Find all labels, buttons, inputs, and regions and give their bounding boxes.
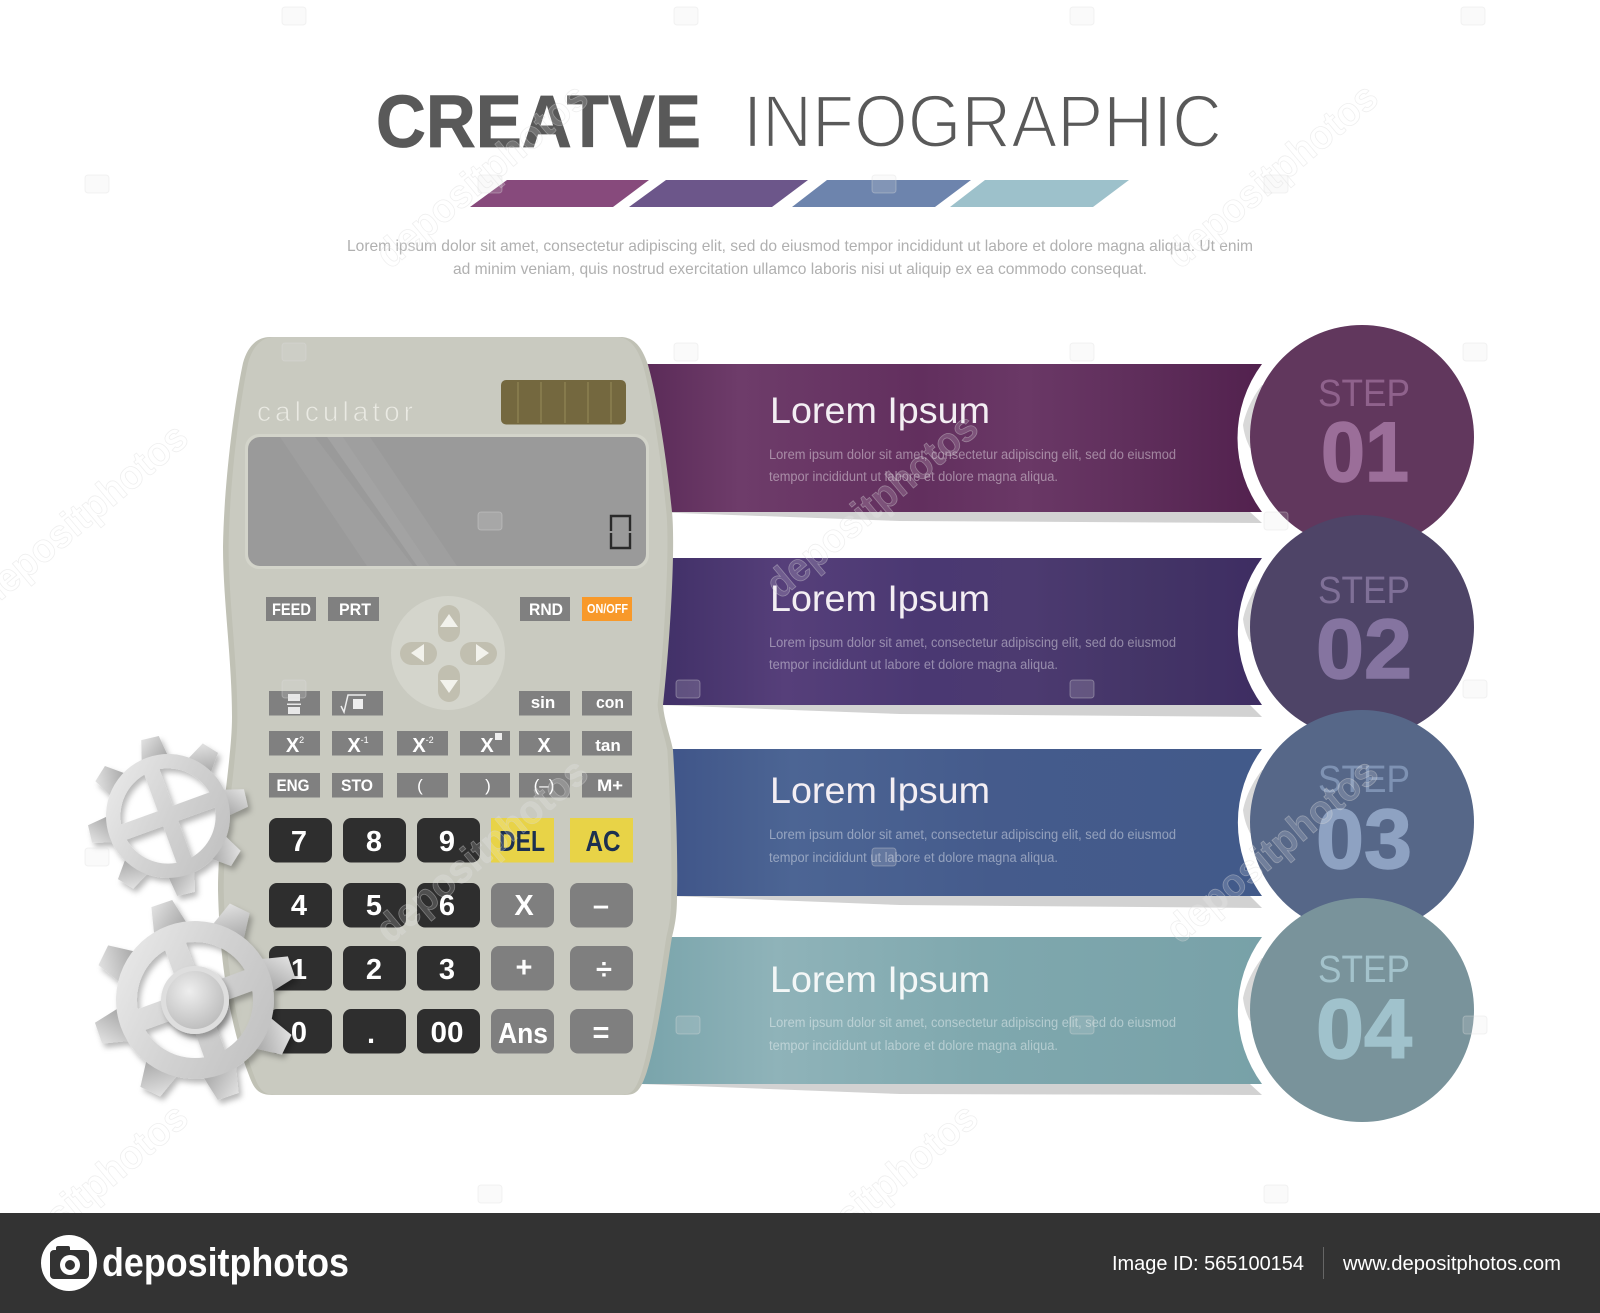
ribbon: step 2 [640,558,1262,717]
math keys row 2: X [537,735,551,757]
top function keys: FEED [272,600,311,619]
operator keys: X [514,890,534,922]
step circle 2 [1238,515,1474,739]
watermark: depositphotos [368,750,596,952]
watermark: depositphotos [758,1095,986,1297]
math keys row 2: tan [595,736,621,755]
icon: small gear [72,720,264,912]
title: CREATVE [376,80,701,163]
step circle 3: 03 [1316,792,1412,886]
watermark: depositphotos [368,75,596,277]
top function keys [266,597,632,621]
intro text: ad minim veniam, quis nostrud exercitation ullamco laboris nisi ut aliquip ex ea commodo consequat. [453,261,1147,278]
math keys row 1: sin [531,693,555,712]
math keys row 3 [269,773,632,798]
ribbon: step 4: Lorem Ipsum [770,959,990,1000]
number pad: 6 [439,890,455,922]
step circle 3: STEP [1318,759,1410,801]
math keys row 2: X [412,735,426,757]
number pad: 7 [291,826,307,858]
website url: www.depositphotos.com [1342,1253,1561,1275]
top function keys: ON/OFF [587,601,628,616]
ribbon: step 2: Lorem Ipsum [770,578,990,619]
operator keys: = [593,1017,609,1049]
step circle 2: 02 [1316,602,1412,696]
math keys row 2: X [286,735,299,757]
math keys row 2: X [347,735,361,757]
watermark: depositphotos [1158,750,1386,952]
intro text: Lorem ipsum dolor sit amet, consectetur adipiscing elit, sed do eiusmod tempor incididunt ut labore et dolore magna aliqua. Ut enim [347,238,1253,255]
math keys row 2: -2 [426,735,434,745]
operator keys: + [516,952,532,984]
step circle 4 [1238,898,1474,1122]
solar panel [501,380,626,424]
math keys row 2: -1 [361,735,369,745]
number pad: 3 [439,954,455,986]
title: INFOGRAPHIC [743,80,1222,163]
direction pad [391,596,505,710]
math keys row 2: X [480,735,494,757]
number pad: 5 [366,890,382,922]
operator keys: AC [586,826,621,858]
number pad: 00 [430,1017,464,1049]
ribbon: step 1: Lorem ipsum dolor sit amet, consectetur adipiscing elit, sed do eiusmod [769,447,1176,462]
ribbon: step 3 [640,749,1262,908]
number pad: 9 [439,826,455,858]
number pad [269,818,480,1054]
watermark: depositphotos [758,405,986,607]
top function keys: PRT [339,600,372,619]
calculator body [218,337,677,1095]
ribbon: step 1 [630,364,1262,523]
number pad: 1 [291,954,307,986]
ribbon: step 3: Lorem Ipsum [770,770,990,811]
operator keys: – [593,890,609,922]
calculator brand label: calculator [257,396,413,427]
calculator [218,337,677,1095]
ribbon: step 4: tempor incididunt ut labore et dolore magna aliqua. [769,1038,1058,1053]
footer bar [0,1213,1600,1313]
math keys row 3: M+ [597,776,623,795]
math keys row 3: ) [485,776,491,795]
step circle 4: STEP [1318,949,1410,991]
ribbon: step 2: tempor incididunt ut labore et dolore magna aliqua. [769,657,1058,672]
step circle 1: 01 [1321,405,1409,499]
math keys row 3: ( [417,776,423,795]
operator keys [491,818,633,1054]
step circle 1 [1237,325,1474,549]
watermark camera marks [85,7,1487,1203]
operator keys: Ans [498,1018,548,1050]
ribbon: step 4: Lorem ipsum dolor sit amet, consectetur adipiscing elit, sed do eiusmod [769,1015,1176,1030]
step circle 4: 04 [1316,982,1412,1076]
watermark: depositphotos [1158,75,1386,277]
icon: depositphotos logo [41,1235,97,1291]
image id: Image ID: 565100154 [1112,1253,1304,1275]
math keys row 3: ENG [276,776,310,795]
number pad: 4 [291,890,307,922]
top function keys: RND [529,600,563,619]
display screen [245,434,649,569]
operator keys: ÷ [596,954,612,986]
brand name: depositphotos [102,1241,349,1285]
math keys row 1 [269,691,632,716]
math keys row 1: con [596,693,624,712]
step circle 1: STEP [1318,373,1410,415]
ribbon: step 4 [620,937,1262,1095]
ribbon: step 3: Lorem ipsum dolor sit amet, consectetur adipiscing elit, sed do eiusmod [769,827,1176,842]
math keys row 3: STO [341,776,373,795]
number pad: 2 [366,954,382,986]
step circle 3 [1238,710,1474,934]
math keys row 2: 2 [299,735,304,745]
icon: large gear [65,870,325,1130]
ribbon: step 1: Lorem Ipsum [770,390,990,431]
color bars under title [470,180,1129,207]
ribbon: step 2: Lorem ipsum dolor sit amet, consectetur adipiscing elit, sed do eiusmod [769,635,1176,650]
title [376,80,1222,163]
ribbon: step 1: tempor incididunt ut labore et dolore magna aliqua. [769,469,1058,484]
math keys row 2 [269,731,632,757]
operator keys: DEL [499,826,545,858]
number pad: 0 [291,1017,307,1049]
number pad: . [367,1018,375,1050]
number pad: 8 [366,826,382,858]
ribbon: step 3: tempor incididunt ut labore et dolore magna aliqua. [769,850,1058,865]
step circle 2: STEP [1318,570,1410,612]
intro text [347,238,1253,278]
math keys row 3: (–) [534,776,554,795]
